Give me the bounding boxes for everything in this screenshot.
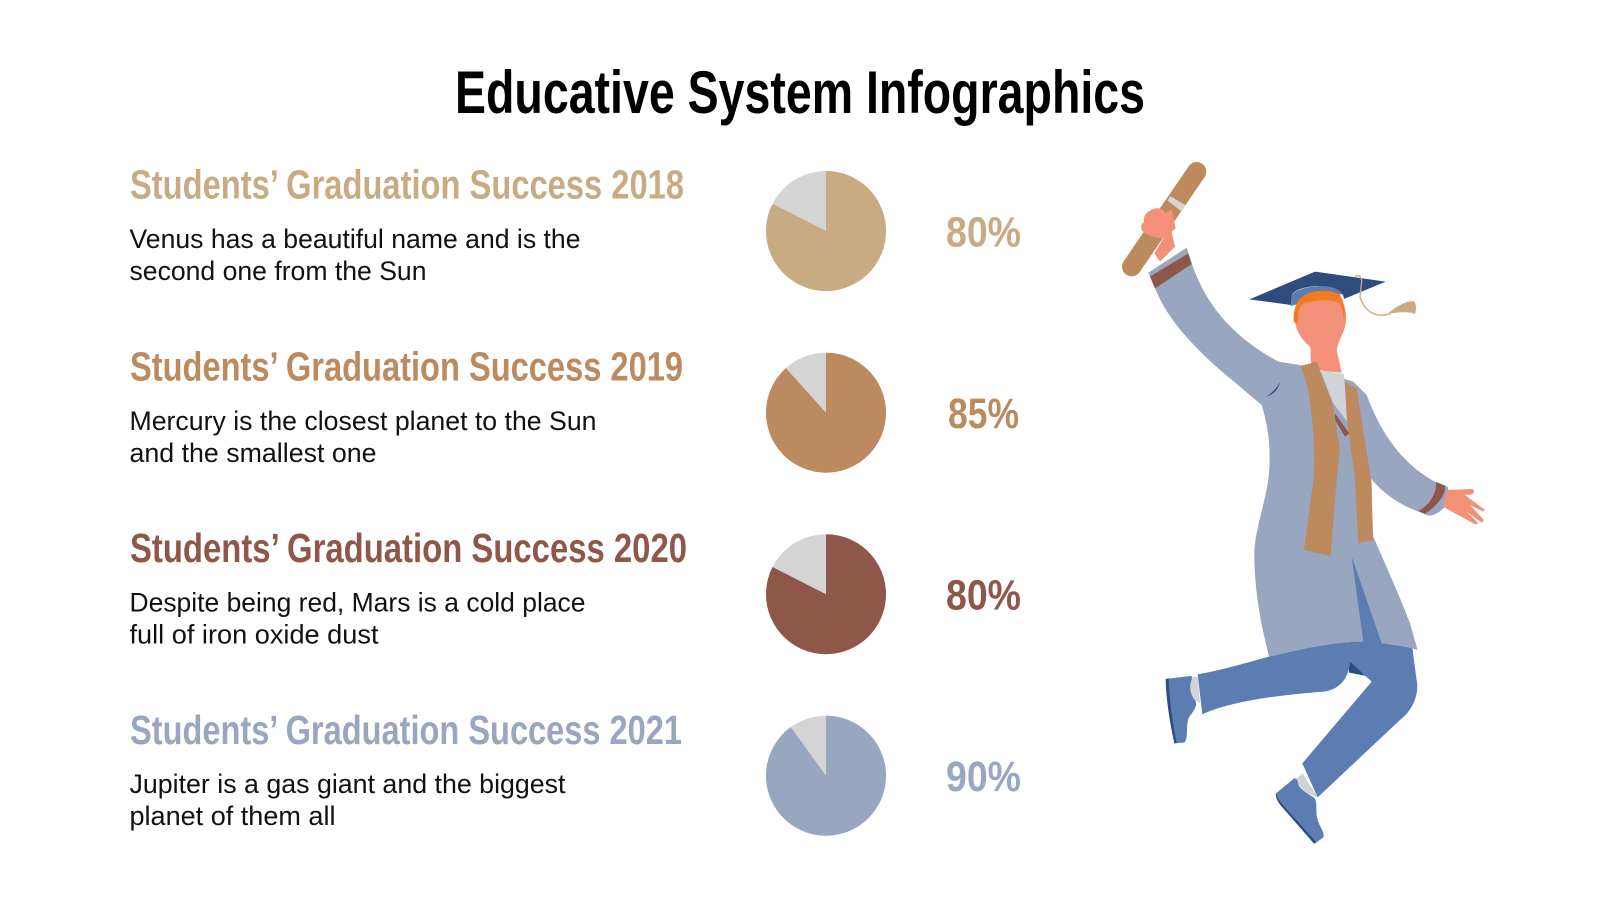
text block: 2019 description: Mercury is the closest planet to the Sun bbox=[130, 406, 596, 436]
value: 80%: 80% bbox=[946, 572, 1021, 620]
icon: sleeve cuffs bbox=[1150, 253, 1445, 514]
title: Educative System Infographics bbox=[455, 59, 1145, 126]
icon: shirt bbox=[1320, 370, 1347, 422]
heading: 2018: Students’ Graduation Success 2018 bbox=[130, 162, 684, 208]
icon: diploma scroll bbox=[1132, 172, 1197, 267]
text block: 2020 description bbox=[130, 588, 586, 650]
panel: row 2020 bbox=[130, 525, 1021, 654]
icon: legs bbox=[1166, 637, 1417, 844]
heading: 2019: Students’ Graduation Success 2019 bbox=[130, 344, 683, 390]
icon: open hand bbox=[1443, 489, 1485, 524]
panel: row 2019 bbox=[130, 344, 1019, 473]
text block: 2021 description: Jupiter is a gas giant and the biggest bbox=[130, 769, 566, 799]
icon: head and neck bbox=[1295, 298, 1346, 373]
text block: 2020 description: full of iron oxide dust bbox=[130, 620, 379, 650]
pie chart: 80% bbox=[766, 534, 886, 654]
pie chart: 85% bbox=[766, 353, 886, 473]
value: 80%: 80% bbox=[946, 208, 1021, 256]
heading: 2021: Students’ Graduation Success 2021 bbox=[130, 707, 682, 753]
text block: 2018 description: Venus has a beautiful name and is the bbox=[130, 224, 580, 254]
text block: 2018 description: second one from the Sun bbox=[130, 256, 426, 286]
heading: 2020: Students’ Graduation Success 2020 bbox=[130, 525, 687, 571]
icon: gown slit bbox=[1352, 557, 1382, 643]
text block: 2020 description: Despite being red, Mars is a cold place bbox=[130, 588, 586, 618]
text block: 2021 description: planet of them all bbox=[130, 801, 336, 831]
text block: 2019 description bbox=[130, 406, 596, 468]
text block: 2018 description bbox=[130, 224, 580, 286]
text block: 2019 description: and the smallest one bbox=[130, 438, 376, 468]
icon: tie bbox=[1335, 413, 1349, 437]
illustration: jumping graduate bbox=[1132, 172, 1485, 844]
value: 90%: 90% bbox=[946, 753, 1021, 801]
icon: sleeve crease bbox=[1267, 382, 1280, 397]
panel: row 2021 bbox=[130, 707, 1021, 836]
icon: scarf bbox=[1300, 362, 1373, 556]
panel: row 2018 bbox=[130, 162, 1021, 291]
value: 85%: 85% bbox=[948, 390, 1019, 438]
icon: gown bbox=[1148, 248, 1449, 657]
text block: 2021 description bbox=[130, 769, 566, 831]
icon: graduation cap bbox=[1249, 272, 1416, 323]
pie chart: 80% bbox=[766, 171, 886, 291]
pie chart: 90% bbox=[766, 716, 886, 836]
